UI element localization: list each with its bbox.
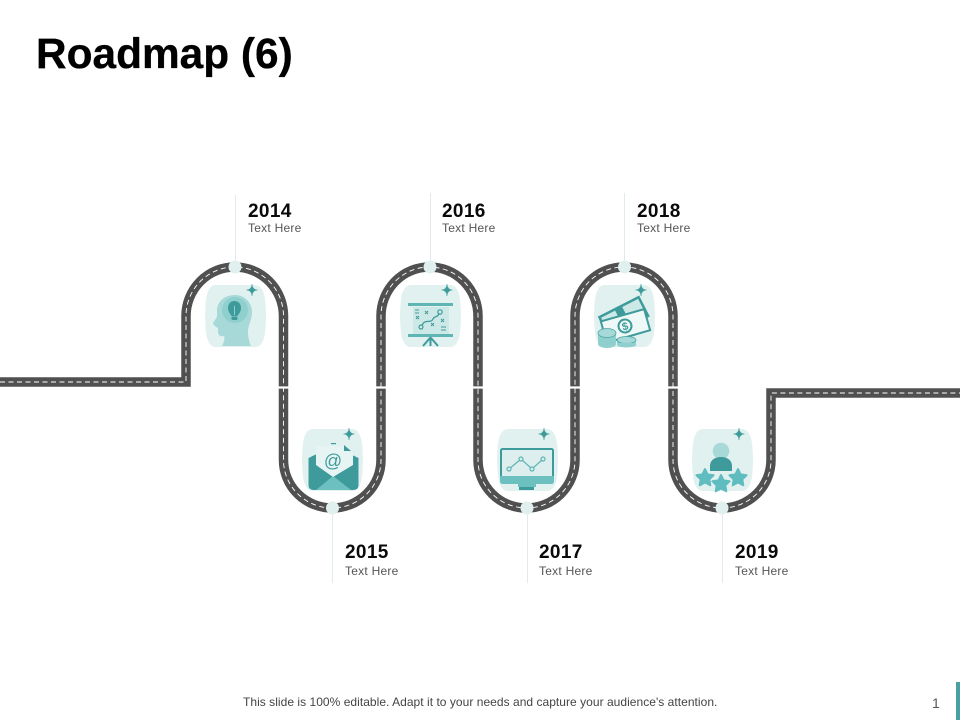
icon: computer monitor with line chart bbox=[497, 428, 558, 491]
icon: banknotes and coins bbox=[594, 284, 655, 348]
title: Roadmap (6) bbox=[36, 30, 293, 77]
milestone 2019: 2019 bbox=[735, 542, 779, 563]
milestone 2014: 2014 bbox=[248, 201, 292, 222]
icon: strategy board bbox=[400, 284, 461, 347]
accent bar bbox=[956, 682, 960, 720]
milestone 2019: Text Here bbox=[735, 564, 789, 578]
milestone 2015: 2015 bbox=[345, 542, 389, 563]
milestone 2018: 2018 bbox=[637, 201, 681, 222]
icon: person with three stars bbox=[692, 428, 753, 491]
milestone 2016: 2016 bbox=[442, 201, 486, 222]
milestone 2018 bbox=[618, 193, 691, 274]
icon: banknotes and coins: $ bbox=[621, 320, 630, 334]
milestone 2014: Text Here bbox=[248, 221, 302, 235]
milestone 2016: Text Here bbox=[442, 221, 496, 235]
milestone 2015: Text Here bbox=[345, 564, 399, 578]
milestone 2019 bbox=[716, 502, 789, 583]
icon: open envelope bbox=[302, 428, 363, 491]
milestone 2014 bbox=[228, 195, 302, 274]
milestone 2017: Text Here bbox=[539, 564, 593, 578]
milestone 2016 bbox=[424, 193, 496, 274]
milestone 2015 bbox=[326, 502, 399, 583]
milestone 2018: Text Here bbox=[637, 221, 691, 235]
milestone 2017 bbox=[520, 502, 593, 583]
page number: 1 bbox=[932, 695, 940, 711]
road bbox=[0, 267, 960, 508]
milestone 2017: 2017 bbox=[539, 542, 583, 563]
icon: open envelope: @ bbox=[324, 451, 342, 471]
footer note: This slide is 100% editable. Adapt it to your needs and capture your audience's attention. bbox=[243, 695, 717, 709]
icon: head with lightbulb bbox=[205, 284, 266, 347]
